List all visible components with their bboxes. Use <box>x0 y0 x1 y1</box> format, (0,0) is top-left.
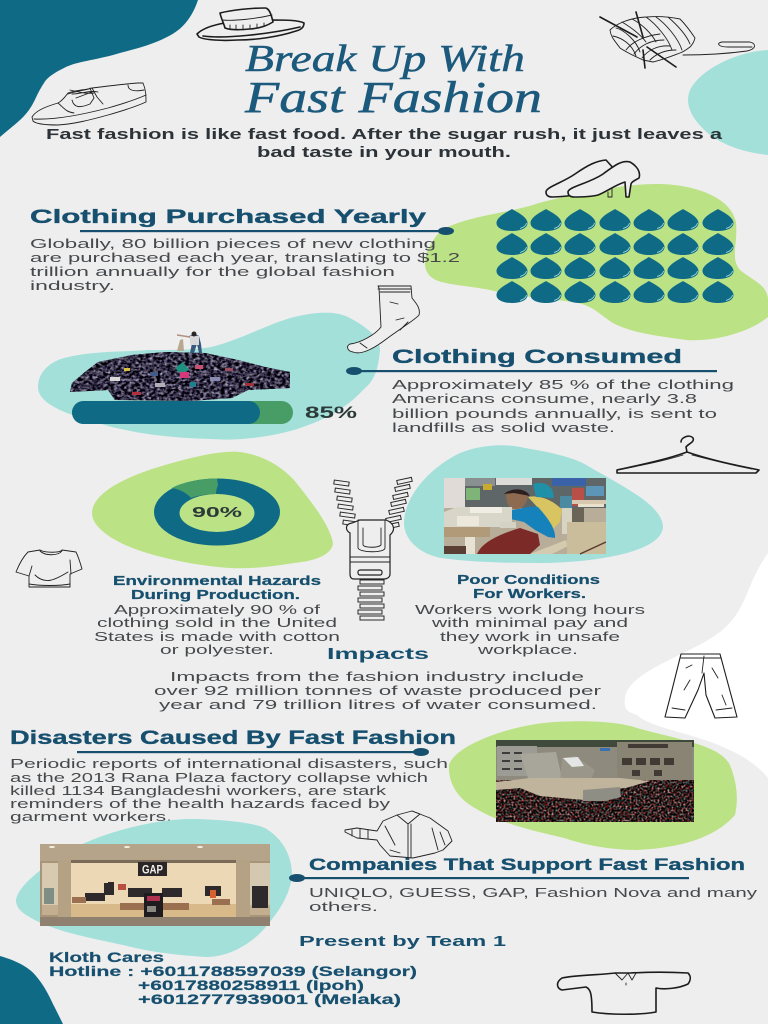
tagline: Fast fashion is like fast food. After the sugar rush, it just leaves a <box>46 126 723 143</box>
text: disasters: killed 1134 Bangladeshi workers, are stark <box>10 783 387 798</box>
text: environmental hazards <box>94 602 340 657</box>
light teal blob top right <box>688 50 768 155</box>
tagline <box>46 126 723 161</box>
text: clothing purchased: are purchased each year, translating to $1.2 <box>30 250 460 265</box>
icon: high heels <box>546 160 640 197</box>
heading: clothing purchased yearly: Clothing Purchased Yearly <box>30 207 427 228</box>
icon: zipper <box>334 477 412 620</box>
panel: green blob disasters <box>449 721 737 850</box>
contact block: Hotline : +6011788597039 (Selangor) <box>49 963 417 979</box>
panel: teal blob workers <box>404 445 663 563</box>
text: disasters <box>10 756 448 824</box>
heading: impacts: Impacts <box>327 646 429 663</box>
heading: disasters: Disasters Caused By Fast Fashion <box>10 728 456 749</box>
heading: poor conditions <box>457 573 600 601</box>
icon: hat <box>197 8 304 40</box>
title <box>244 38 542 122</box>
text: impacts: year and 79 trillion litres of water consumed. <box>159 697 597 712</box>
contact block <box>49 949 417 1007</box>
icon: long-sleeve shirt <box>558 972 690 1014</box>
text: clothing consumed: Approximately 85 % of the clothing <box>392 377 734 392</box>
heading: companies: Companies That Support Fast Fashion <box>309 855 745 874</box>
heading: poor conditions: For Workers. <box>473 587 586 601</box>
photo: gap store <box>40 844 270 926</box>
text: disasters: Periodic reports of international disasters, such <box>10 756 448 771</box>
icon: hanger <box>617 436 759 473</box>
text: poor conditions: they work in unsafe <box>440 629 620 644</box>
text: impacts: over 92 million tonnes of waste produced per <box>154 683 602 698</box>
photo: clothes pile with person <box>70 332 290 401</box>
credit: team: Present by Team 1 <box>299 934 506 950</box>
icon: sock <box>348 286 419 353</box>
photo: gap store: GAP <box>142 862 163 876</box>
title: Fast Fashion <box>244 73 542 122</box>
donut chart 90%: 90% <box>192 504 242 521</box>
heading: environmental hazards: Environmental Hazards <box>113 574 321 588</box>
text: disasters: garment workers. <box>10 809 172 824</box>
contact block: +6017880258911 (Ipoh) <box>138 977 364 993</box>
text: clothing consumed: Americans consume, nearly 3.8 <box>392 391 697 406</box>
text: clothing purchased: industry. <box>30 278 115 293</box>
text: clothing consumed: billion pounds annually, is sent to <box>392 406 717 421</box>
heading: environmental hazards: During Production. <box>131 588 300 602</box>
text: poor conditions: with minimal pay and <box>430 615 628 630</box>
text: poor conditions <box>415 602 646 657</box>
connector line consumed <box>346 367 717 375</box>
contact block: Kloth Cares <box>49 949 164 965</box>
text: environmental hazards: States is made with cotton <box>94 629 340 644</box>
donut chart 90% <box>154 478 280 546</box>
text: environmental hazards: Approximately 90 % of <box>114 602 321 617</box>
text: clothing consumed <box>392 377 734 435</box>
text: environmental hazards: clothing sold in the United <box>97 615 337 630</box>
connector line disasters <box>77 748 429 756</box>
icon grid: water drops <box>496 209 734 303</box>
text: companies: others. <box>309 899 378 914</box>
text: disasters: as the 2013 Rana Plaza factory collapse which <box>10 770 428 785</box>
contact block: +6012777939001 (Melaka) <box>138 991 401 1007</box>
text: companies <box>309 885 758 914</box>
photo: rana plaza collapse <box>496 740 694 822</box>
progress bar 85% <box>72 401 358 424</box>
dark teal corner blob top left <box>0 0 198 137</box>
heading: environmental hazards <box>113 574 321 602</box>
text: clothing purchased: trillion annually for the global fashion <box>30 264 395 279</box>
heading: poor conditions: Poor Conditions <box>457 573 600 587</box>
icon: yarn ball with needles <box>600 12 755 68</box>
progress bar 85%: 85% <box>305 404 358 422</box>
dark teal corner blob bottom left <box>0 956 63 1024</box>
panel: teal blob companies <box>16 819 292 957</box>
text: impacts: Impacts from the fashion industry include <box>170 669 584 684</box>
icon: shoe <box>32 83 146 125</box>
icon: t-shirt <box>16 550 82 587</box>
panel: green blob clothing purchased <box>425 184 768 340</box>
text: clothing purchased: Globally, 80 billion pieces of new clothing <box>30 236 436 251</box>
white background blob right <box>625 553 768 778</box>
title: Break Up With <box>245 38 525 80</box>
text: poor conditions: Workers work long hours <box>415 602 646 617</box>
text: disasters: reminders of the health hazards faced by <box>10 796 391 811</box>
icon: trousers <box>665 654 737 718</box>
panel: green blob environmental <box>92 452 333 568</box>
text: environmental hazards: or polyester. <box>160 642 274 657</box>
photo: garment workers <box>444 478 606 554</box>
icon: jacket <box>345 811 452 858</box>
text: companies: UNIQLO, GUESS, GAP, Fashion Nova and many <box>309 885 758 900</box>
panel: teal blob clothing consumed <box>38 313 380 440</box>
text: impacts <box>154 669 602 712</box>
connector line companies <box>289 874 689 882</box>
text: poor conditions: workplace. <box>476 642 578 657</box>
tagline: bad taste in your mouth. <box>257 144 511 161</box>
connector line purchased <box>80 227 454 235</box>
text: clothing consumed: landfills as solid waste. <box>392 420 615 435</box>
text: clothing purchased <box>30 236 460 293</box>
heading: clothing consumed: Clothing Consumed <box>392 347 682 368</box>
